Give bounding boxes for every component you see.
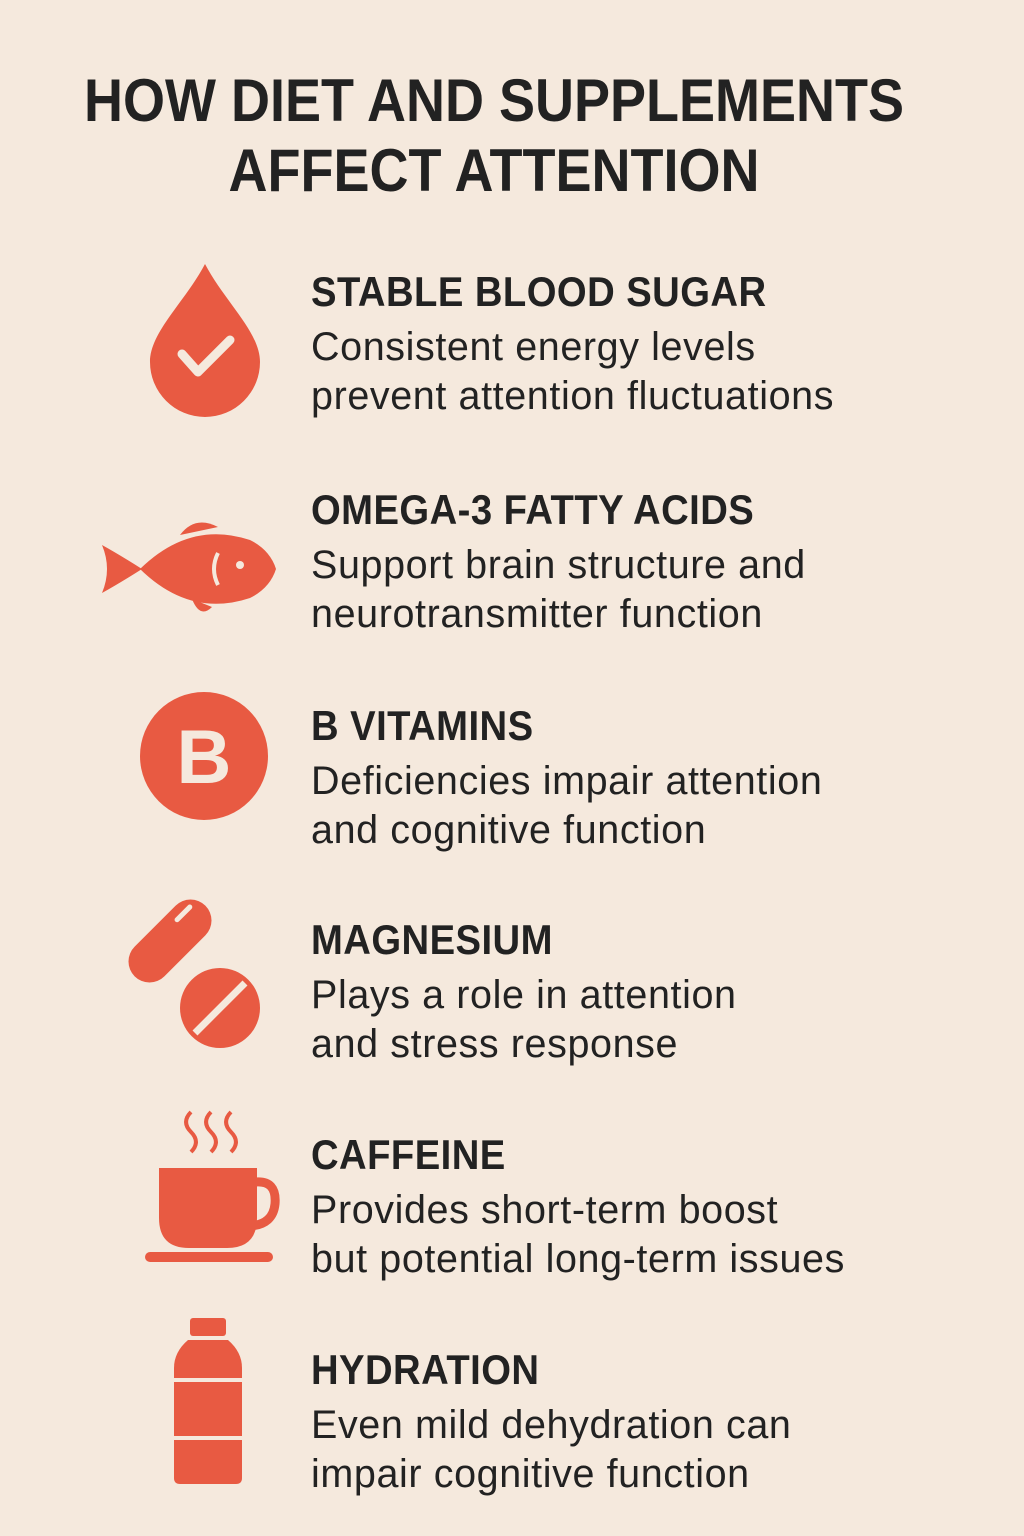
item: magnesium (311, 916, 737, 1066)
icon: coffee cup (145, 1110, 280, 1262)
icon: pills (128, 900, 260, 1048)
icon: fish (102, 522, 276, 612)
item: omega-3: Support brain structure and (311, 543, 806, 587)
item: hydration: Even mild dehydration can (311, 1403, 792, 1447)
item: B vitamins (311, 702, 822, 852)
item: omega-3: OMEGA-3 FATTY ACIDS (311, 486, 754, 533)
item: magnesium: and stress response (311, 1022, 678, 1066)
item: stable blood sugar: STABLE BLOOD SUGAR (311, 268, 767, 315)
item: B vitamins: B VITAMINS (311, 702, 534, 749)
item: B vitamins: Deficiencies impair attention (311, 759, 822, 803)
title (84, 67, 904, 204)
icon: water bottle (174, 1318, 242, 1484)
item: magnesium: MAGNESIUM (311, 916, 553, 963)
item: magnesium: Plays a role in attention (311, 973, 737, 1017)
icon: B vitamin: B (177, 715, 231, 800)
item: hydration: HYDRATION (311, 1346, 539, 1393)
item: caffeine: but potential long-term issues (311, 1237, 845, 1281)
icon: B vitamin (140, 692, 268, 820)
item: hydration (311, 1346, 792, 1496)
item: stable blood sugar: prevent attention fluctuations (311, 374, 834, 418)
item: caffeine (311, 1131, 845, 1281)
item: caffeine: Provides short-term boost (311, 1188, 778, 1232)
icon: blood drop (150, 264, 260, 417)
item: caffeine: CAFFEINE (311, 1131, 506, 1178)
item: hydration: impair cognitive function (311, 1452, 750, 1496)
item: stable blood sugar: Consistent energy levels (311, 325, 756, 369)
title: AFFECT ATTENTION (229, 137, 759, 204)
item: omega-3 (311, 486, 806, 636)
item: stable blood sugar (311, 268, 834, 418)
title: HOW DIET AND SUPPLEMENTS (84, 67, 904, 134)
item: B vitamins: and cognitive function (311, 808, 706, 852)
item: omega-3: neurotransmitter function (311, 592, 763, 636)
